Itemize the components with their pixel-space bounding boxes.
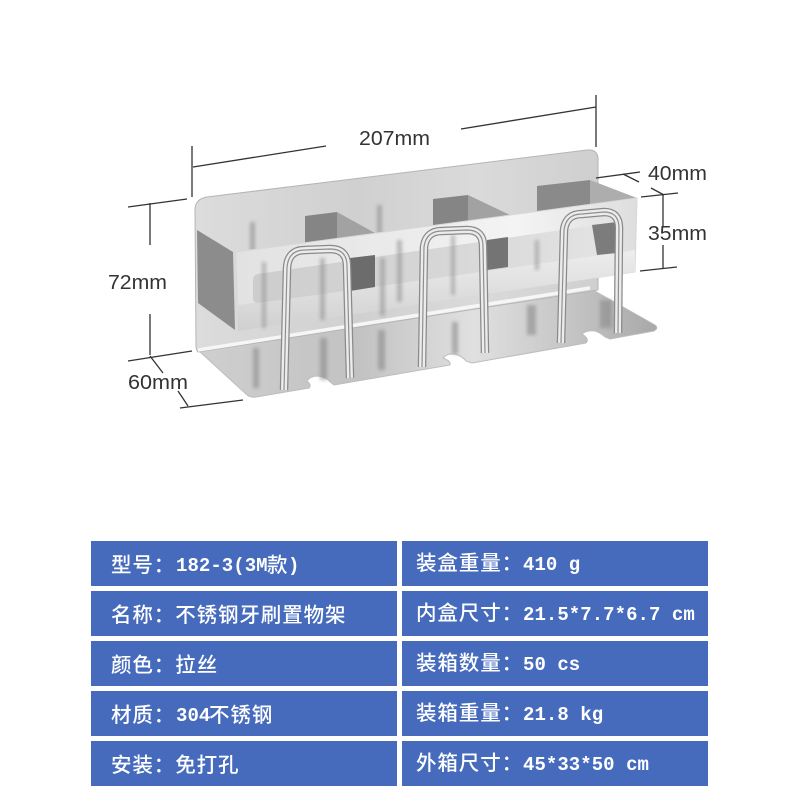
row: material: 304: [176, 705, 210, 727]
compartment shadows on back plate: [305, 180, 637, 245]
row: inner box size: 内盒尺寸：: [416, 602, 523, 625]
row: model: 型号：: [111, 554, 175, 577]
row: carton quantity: 50 cs: [523, 654, 580, 676]
fold highlight: [198, 288, 590, 350]
spec table: right column: [402, 541, 708, 786]
row: model: 款: [267, 554, 288, 577]
product: stainless toothbrush rack: [195, 150, 657, 397]
hook 2: [422, 230, 485, 367]
row: name: 名称：不锈钢牙刷置物架: [111, 604, 346, 627]
row: inner box size: [402, 591, 708, 636]
dimension: 60mm depth: [128, 356, 243, 408]
dimension: 60mm depth: 60mm: [128, 372, 188, 394]
row: box weight: 410 g: [523, 554, 580, 576]
dimension: 72mm height: 72mm: [108, 272, 167, 294]
hook 1: [284, 249, 350, 390]
dimension: 40mm depth: [596, 163, 707, 195]
row: material: 材质：: [111, 704, 175, 727]
back plate: [195, 150, 598, 352]
dimension: 72mm height: [108, 199, 192, 361]
row: installation: 安装：免打孔: [111, 754, 239, 777]
row: carton quantity: 装箱数量：: [416, 652, 523, 675]
row: model: ): [288, 555, 299, 577]
streak reflections: [250, 205, 382, 252]
row: carton weight: [402, 691, 708, 736]
row: model: 182-3(3M: [176, 555, 268, 577]
row: model: [91, 541, 397, 586]
row: carton quantity: [402, 641, 708, 686]
row: material: 不锈钢: [209, 704, 273, 727]
left side face: [197, 230, 235, 330]
front streaks: [262, 235, 539, 328]
row: carton size: [402, 741, 708, 786]
row: colour: 颜色：拉丝: [111, 654, 218, 677]
row: material: [91, 691, 397, 736]
row: box weight: [402, 541, 708, 586]
row: carton size: 外箱尺寸：: [416, 752, 523, 775]
rack base plate: [198, 290, 657, 397]
front window: [253, 222, 617, 303]
front face: [236, 198, 637, 331]
front lower band: [238, 250, 635, 331]
row: carton weight: 装箱重量：: [416, 702, 523, 725]
dimension: 207mm width: [192, 95, 596, 197]
base reflections: [253, 300, 612, 388]
dimension: 35mm height: 35mm: [648, 223, 707, 245]
row: installation: [91, 741, 397, 786]
row: name: [91, 591, 397, 636]
row: carton size: 45*33*50 cm: [523, 754, 649, 776]
row: inner box size: 21.5*7.7*6.7 cm: [523, 604, 695, 626]
row: colour: [91, 641, 397, 686]
dividers seen through window: [350, 222, 617, 291]
dimension: 40mm depth: 40mm: [648, 163, 707, 185]
row: box weight: 装盒重量：: [416, 552, 523, 575]
dimension: 207mm width: 207mm: [359, 128, 430, 150]
spec table: left column: [91, 541, 397, 786]
hook 3: [561, 212, 619, 343]
row: carton weight: 21.8 kg: [523, 704, 603, 726]
dimension: 35mm height: [640, 193, 707, 271]
